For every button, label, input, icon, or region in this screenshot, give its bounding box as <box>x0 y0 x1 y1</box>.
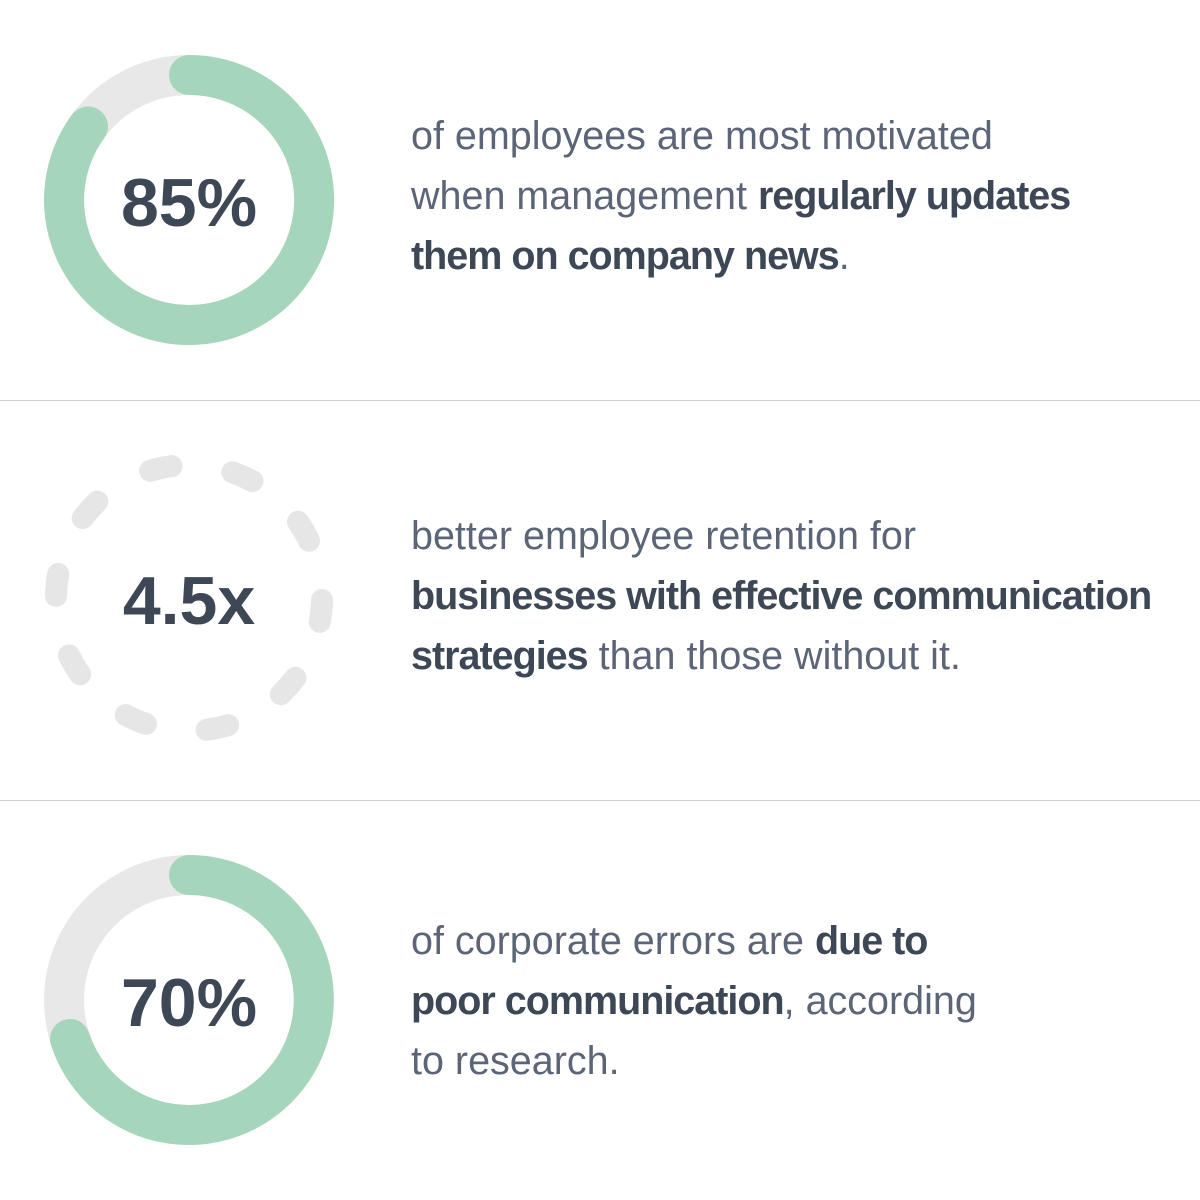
text: 70% description: of corporate errors are due to <box>411 919 927 963</box>
chart: dashed ring <box>45 455 333 741</box>
chart: 70% ring: 70% <box>121 965 257 1041</box>
text: 70% description <box>411 919 977 1083</box>
text: 4.5x description: strategies than those without it. <box>411 634 961 678</box>
text: 70% description: to research. <box>411 1039 620 1083</box>
text: 85% description: when management regularly updates <box>411 174 1070 218</box>
panel: 85% stat <box>44 55 1070 345</box>
chart: 70% ring <box>44 855 334 1145</box>
text: 85% description: them on company news. <box>411 234 850 278</box>
text: 85% description: of employees are most motivated <box>411 114 993 158</box>
text: 85% description <box>411 114 1070 278</box>
chart: 85% ring <box>44 55 334 345</box>
chart: dashed ring: 4.5x <box>123 563 255 639</box>
chart: 85% ring: 85% <box>121 165 257 241</box>
panel: 70% stat <box>44 855 977 1145</box>
text: 4.5x description: businesses with effective communication <box>411 574 1151 618</box>
panel: 4.5x stat <box>45 455 1151 741</box>
text: 4.5x description <box>411 514 1151 678</box>
text: 70% description: poor communication, according <box>411 979 977 1023</box>
text: 4.5x description: better employee retention for <box>411 514 916 558</box>
